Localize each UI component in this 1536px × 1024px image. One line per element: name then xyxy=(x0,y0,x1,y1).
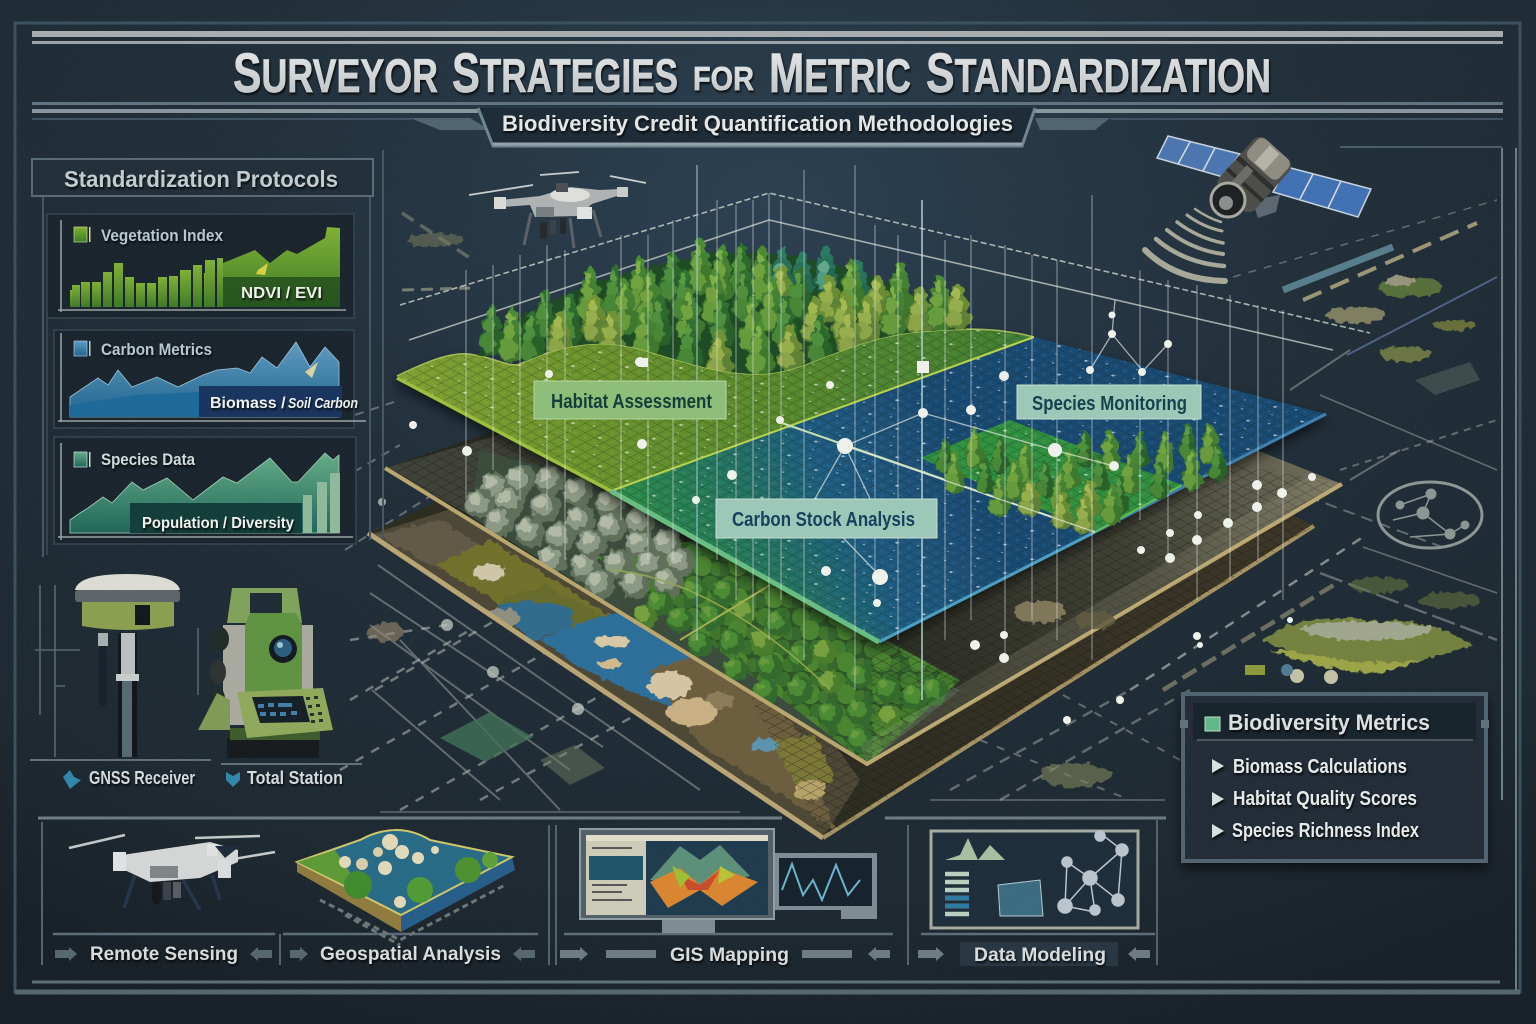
metric list xyxy=(1212,756,1419,842)
label: geospatial analysis: Geospatial Analysis xyxy=(320,944,501,965)
metric list: Biomass Calculations xyxy=(1233,756,1407,778)
title: STRATEGIES xyxy=(452,41,678,104)
label: data modeling xyxy=(918,942,1150,966)
survey nodes and links xyxy=(409,300,1316,724)
label: Carbon Stock Analysis: Carbon Stock Analysis xyxy=(732,509,915,531)
background survey map lines xyxy=(340,193,1497,812)
metric list: Species Richness Index xyxy=(1232,820,1419,842)
title: SURVEYOR xyxy=(233,41,438,104)
layer: middle forest xyxy=(384,431,1343,766)
panel heading: Standardization Protocols xyxy=(64,166,338,192)
network circle icon xyxy=(1378,482,1482,548)
subtitle plate xyxy=(410,108,1110,146)
label: Species Monitoring: Species Monitoring xyxy=(1032,393,1187,415)
label: GIS mapping xyxy=(560,945,890,966)
panel: biodiversity metrics xyxy=(1180,694,1489,861)
chart: vegetation index: Vegetation Index xyxy=(101,226,223,245)
chart: carbon metrics xyxy=(54,330,366,428)
icon: geospatial layered map xyxy=(297,830,515,945)
heading: Biodiversity Metrics xyxy=(1228,710,1430,735)
panel heading xyxy=(32,159,373,196)
title xyxy=(233,41,1271,104)
layer: lower terrain map xyxy=(366,480,1483,840)
chart: vegetation index xyxy=(47,214,354,318)
icon: data modeling monitor xyxy=(931,831,1138,928)
label: GNSS receiver: GNSS Receiver xyxy=(89,768,195,788)
drone: top xyxy=(469,172,646,248)
label: remote sensing xyxy=(55,944,272,965)
chart: carbon metrics: Carbon Metrics xyxy=(101,340,212,359)
title: STANDARDIZATION xyxy=(926,41,1271,104)
subtitle plate: Biodiversity Credit Quantification Methodologies xyxy=(502,111,1013,136)
chart: species data: Population / Diversity xyxy=(142,515,294,532)
label: GIS mapping: GIS Mapping xyxy=(670,945,789,966)
label: Habitat Assessment: Habitat Assessment xyxy=(551,391,712,413)
chart: species data: Species Data xyxy=(101,450,195,469)
panel: standardization protocols xyxy=(32,150,383,557)
background vegetation patches xyxy=(368,233,1480,787)
icon: GIS monitor xyxy=(580,829,877,933)
layer: top survey grid xyxy=(397,329,1326,642)
label: data modeling: Data Modeling xyxy=(974,945,1106,966)
chart: carbon metrics: Soil Carbon xyxy=(288,396,358,412)
label: Habitat Assessment xyxy=(534,381,726,419)
icon: remote sensing drone xyxy=(69,835,275,910)
forest patch on blue section xyxy=(936,422,1227,534)
title: METRIC xyxy=(769,41,911,104)
label: GNSS receiver xyxy=(30,760,362,789)
chart: vegetation index: NDVI / EVI xyxy=(241,285,322,302)
vertical survey lines xyxy=(466,165,1283,700)
panel: workflow row xyxy=(38,818,1166,966)
label: Species Monitoring xyxy=(1017,385,1201,419)
chart: species data xyxy=(54,437,356,544)
label: remote sensing: Remote Sensing xyxy=(90,944,238,965)
header rules xyxy=(32,31,1503,120)
icon: total station xyxy=(198,588,333,758)
label: Carbon Stock Analysis xyxy=(716,499,937,538)
satellite xyxy=(1157,133,1371,218)
satellite signal waves xyxy=(1145,209,1225,281)
icon: GNSS receiver xyxy=(35,574,180,757)
label: total station: Total Station xyxy=(247,768,343,788)
metric list: Habitat Quality Scores xyxy=(1233,788,1417,810)
forest on top layer xyxy=(475,239,972,380)
chart: carbon metrics: Biomass / xyxy=(210,395,286,412)
title: FOR xyxy=(693,60,754,97)
